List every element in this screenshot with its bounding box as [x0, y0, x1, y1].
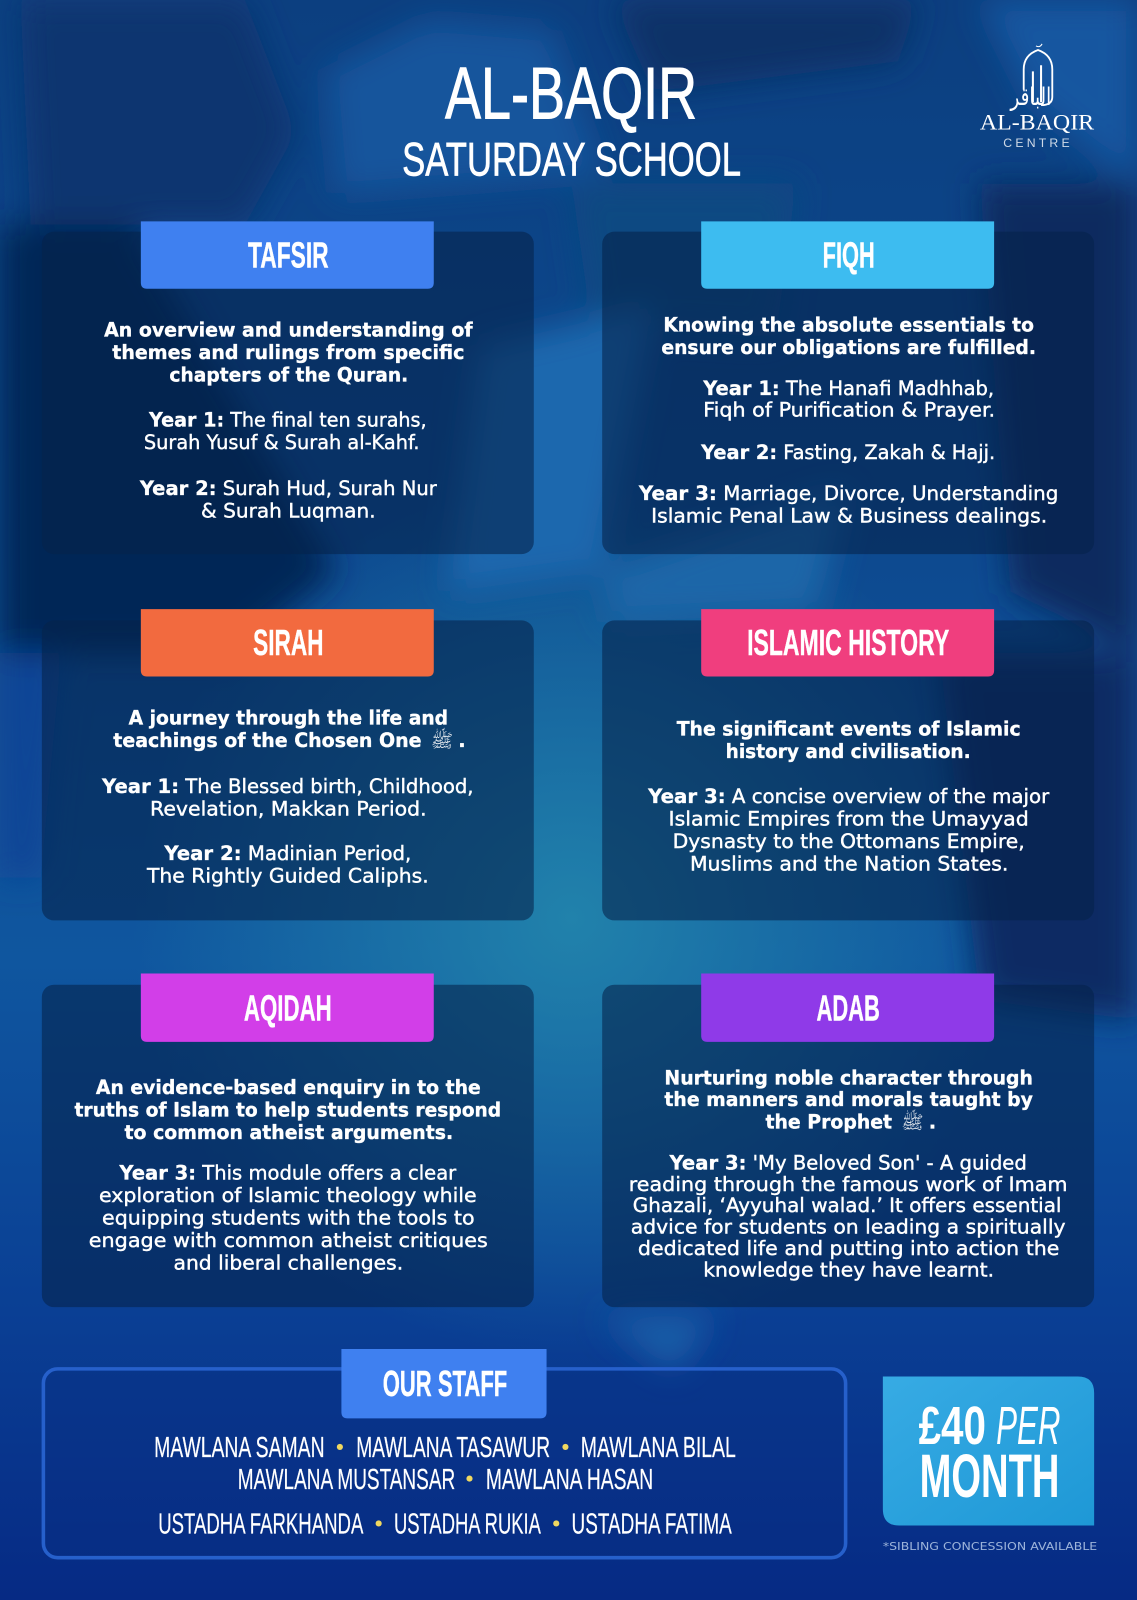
- heading: Fiqh: [701, 221, 994, 289]
- text: Adab description: .: [929, 1111, 936, 1134]
- staff names: MAWLANA SAMAN: [154, 1432, 325, 1464]
- panel: Aqidah: [42, 973, 534, 1307]
- heading: Sirah: [141, 609, 434, 677]
- heading: Adab: [701, 973, 994, 1042]
- text: Aqidah description: engage with common atheist critiques: [89, 1229, 488, 1252]
- text: Fiqh description: [638, 314, 1058, 527]
- text: Tafsir description: chapters of the Quran.: [169, 364, 408, 387]
- text: Adab description: Ghazali, ‘Ayyuhal walad.’ It offers essential: [633, 1194, 1061, 1217]
- logo: Al-Baqir Centre: AL-BAQIR: [980, 110, 1094, 135]
- text: Adab description: dedicated life and putting into action the: [638, 1237, 1059, 1260]
- staff names: USTADHA RUKIA: [394, 1509, 541, 1541]
- note: sibling concession: *SIBLING CONCESSION AVAILABLE: [883, 1540, 1097, 1553]
- heading: Our Staff: OUR STAFF: [383, 1364, 507, 1404]
- logo: Al-Baqir Centre: [980, 44, 1094, 150]
- heading: Our Staff: [341, 1349, 547, 1418]
- text: Islamic History description: Islamic Empires from the Umayyad: [669, 808, 1029, 831]
- text: Islamic History description: Muslims and the Nation States.: [690, 852, 1008, 875]
- text: Adab description: knowledge they have learnt.: [703, 1259, 994, 1282]
- text: Adab description: [629, 1067, 1068, 1282]
- staff names: USTADHA FARKHANDA: [158, 1509, 363, 1541]
- staff names: MAWLANA HASAN: [486, 1464, 653, 1496]
- text: Fiqh description: Knowing the absolute essentials to: [663, 314, 1034, 337]
- heading: Tafsir: TAFSIR: [248, 235, 329, 275]
- panel: Fiqh: [602, 221, 1094, 554]
- heading: Islamic History: ISLAMIC HISTORY: [747, 623, 949, 663]
- text: Aqidah description: exploration of Islamic theology while: [99, 1184, 477, 1207]
- text: Aqidah description: Year 3: This module offers a clear: [118, 1162, 456, 1185]
- panel: Islamic History: [602, 609, 1094, 920]
- text: Aqidah description: to common atheist arguments.: [125, 1121, 453, 1144]
- text: Sirah description: ﷺ: [431, 727, 453, 752]
- text: Aqidah description: equipping students with the tools to: [102, 1206, 475, 1229]
- heading: Tafsir: [141, 221, 434, 289]
- text: Sirah description: Revelation, Makkan Period.: [150, 797, 427, 820]
- title: AL-BAQIR: [445, 51, 697, 134]
- text: Adab description: reading through the famous work of Imam: [629, 1173, 1068, 1196]
- text: Fiqh description: Year 1: The Hanafi Madhhab,: [702, 377, 994, 400]
- text: Islamic History description: Dysnasty to the Ottomans Empire,: [673, 830, 1025, 853]
- text: Fiqh description: Fiqh of Purification & Prayer.: [703, 398, 995, 421]
- panel: Sirah: [42, 609, 534, 920]
- logo: Al-Baqir Centre: CENTRE: [1003, 136, 1070, 150]
- text: Adab description: advice for students on leading a spiritually: [631, 1216, 1066, 1239]
- heading: Islamic History: [701, 609, 994, 677]
- text: Adab description: Nurturing noble character through: [664, 1067, 1033, 1090]
- text: Tafsir description: An overview and understanding of: [104, 319, 473, 342]
- text: Adab description: the manners and morals taught by: [664, 1088, 1033, 1111]
- staff names: MAWLANA BILAL: [581, 1432, 736, 1464]
- price badge: £40: [919, 1396, 986, 1456]
- text: Fiqh description: ensure our obligations are fulfilled.: [661, 336, 1036, 359]
- price badge: PER: [996, 1396, 1060, 1456]
- heading: Adab: ADAB: [817, 988, 880, 1028]
- panel: Adab: [602, 973, 1094, 1307]
- text: Fiqh description: Year 3: Marriage, Divorce, Understanding: [638, 482, 1058, 505]
- text: Tafsir description: [104, 319, 473, 522]
- title: SATURDAY SCHOOL: [402, 134, 741, 186]
- text: Tafsir description: Surah Yusuf & Surah al-Kahf.: [144, 431, 419, 454]
- text: Sirah description: .: [458, 729, 466, 752]
- text: Adab description: the Prophet: [765, 1111, 892, 1134]
- text: Fiqh description: Islamic Penal Law & Business dealings.: [651, 504, 1047, 527]
- title: [402, 51, 741, 186]
- heading: Aqidah: AQIDAH: [244, 988, 332, 1028]
- text: Tafsir description: Year 1: The final ten surahs,: [148, 409, 427, 432]
- heading: Fiqh: FIQH: [823, 235, 875, 275]
- text: Sirah description: Year 2: Madinian Period,: [163, 842, 411, 865]
- text: Sirah description: teachings of the Chosen One: [113, 729, 422, 752]
- staff names: MAWLANA TASAWUR: [356, 1432, 550, 1464]
- staff names: MAWLANA MUSTANSAR: [238, 1464, 455, 1496]
- text: Tafsir description: & Surah Luqman.: [201, 499, 376, 522]
- heading: Aqidah: [141, 973, 434, 1042]
- text: Sirah description: Year 1: The Blessed birth, Childhood,: [101, 775, 474, 798]
- text: Fiqh description: Year 2: Fasting, Zakah & Hajj.: [700, 441, 995, 464]
- heading: Sirah: SIRAH: [253, 623, 324, 663]
- text: Sirah description: [101, 706, 474, 888]
- text: Islamic History description: history and civilisation.: [726, 740, 971, 763]
- staff names: [154, 1432, 736, 1541]
- text: Aqidah description: An evidence-based enquiry in to the: [96, 1076, 481, 1099]
- text: Islamic History description: [647, 718, 1049, 875]
- text: Sirah description: The Rightly Guided Caliphs.: [146, 865, 429, 888]
- text: Aqidah description: truths of Islam to help students respond: [75, 1098, 501, 1121]
- text: Aqidah description: [75, 1076, 501, 1274]
- panel: Our Staff: [43, 1349, 846, 1558]
- text: Islamic History description: Year 3: A concise overview of the major: [647, 785, 1049, 808]
- text: Sirah description: A journey through the life and: [129, 706, 448, 729]
- text: Islamic History description: The significant events of Islamic: [677, 718, 1021, 741]
- text: Tafsir description: themes and rulings from specific: [112, 341, 464, 364]
- text: Tafsir description: Year 2: Surah Hud, Surah Nur: [139, 477, 437, 500]
- text: Adab description: Year 3: 'My Beloved Son' - A guided: [669, 1151, 1027, 1174]
- panel: Tafsir: [42, 221, 534, 554]
- text: Aqidah description: and liberal challenges.: [174, 1251, 403, 1274]
- staff names: USTADHA FATIMA: [572, 1509, 732, 1541]
- price badge: [883, 1377, 1094, 1526]
- text: Adab description: ﷺ: [901, 1109, 924, 1134]
- logo: Al-Baqir Centre: الباقر: [1009, 82, 1051, 111]
